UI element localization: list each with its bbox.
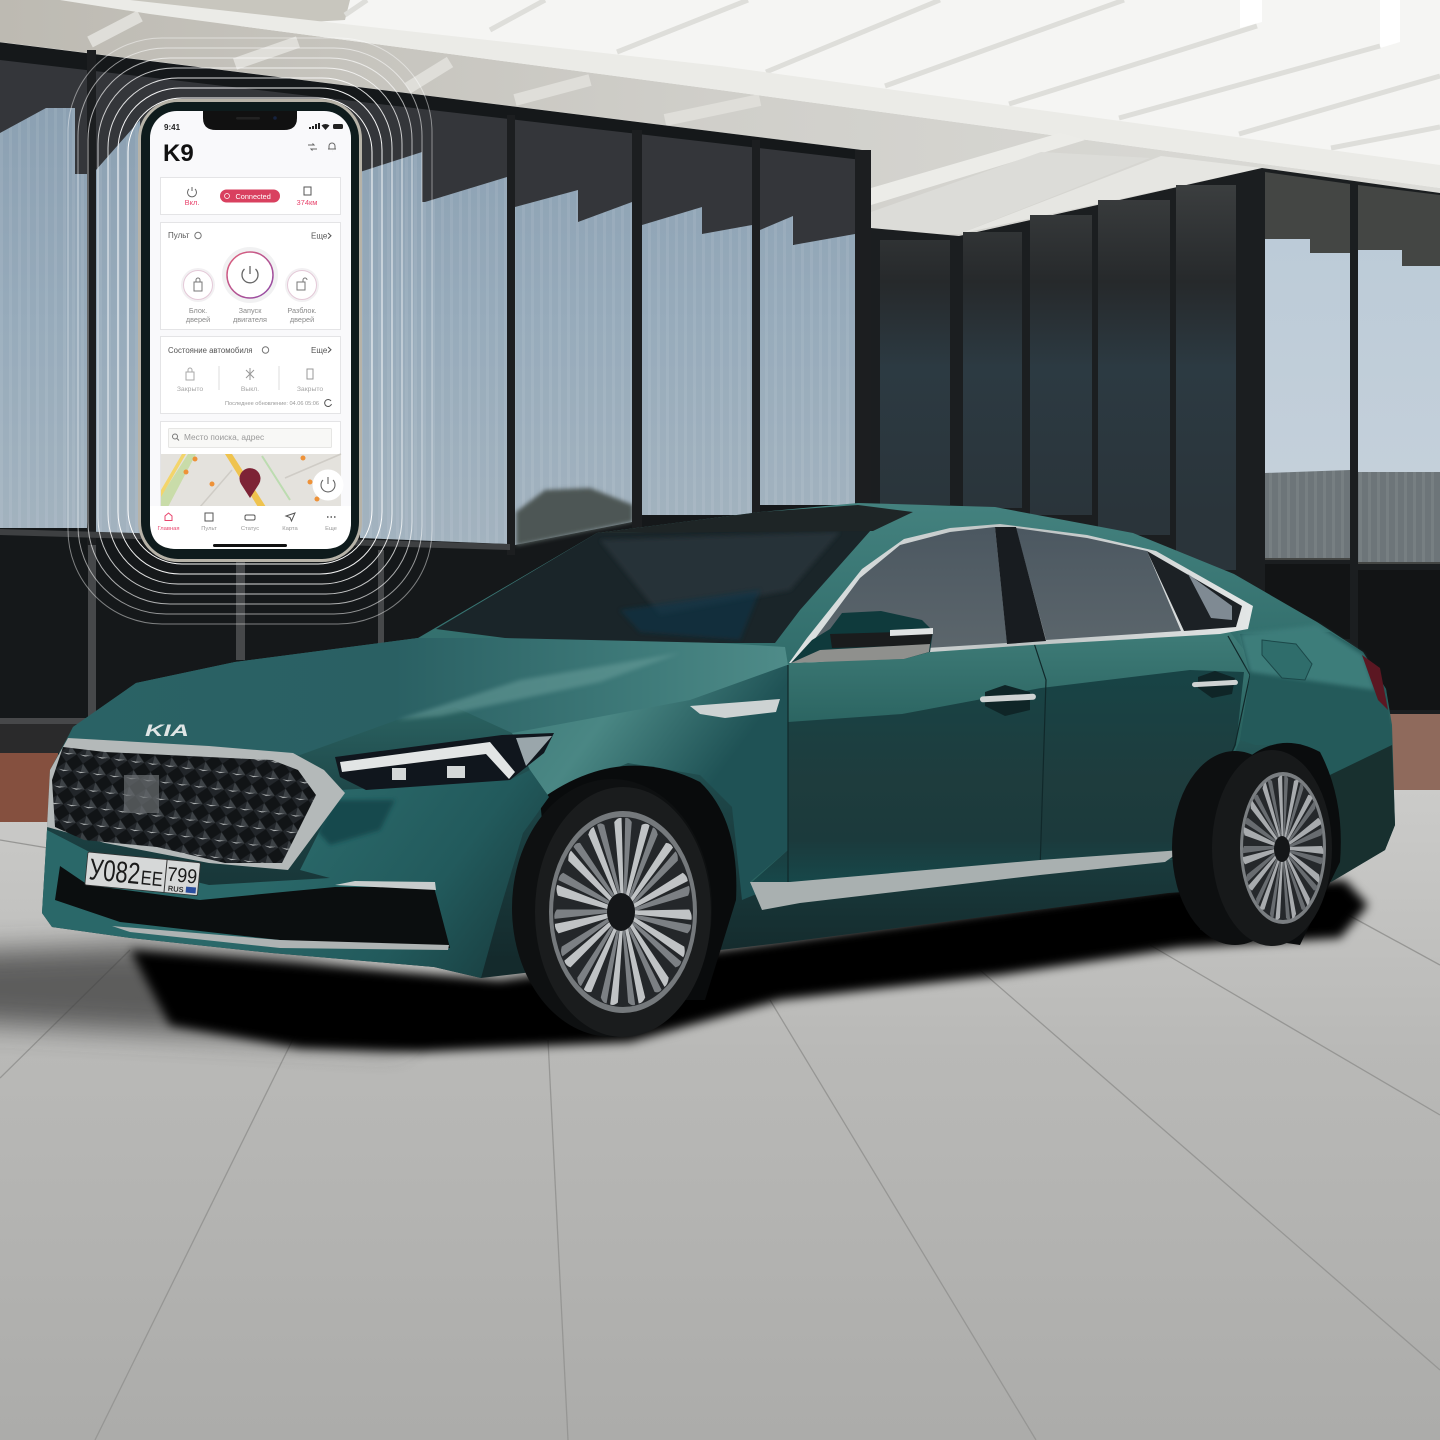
phone frame <box>138 99 362 562</box>
signal rings around phone <box>68 38 432 624</box>
tab bar: Пульт <box>201 526 217 532</box>
header icons <box>308 143 336 151</box>
card: vehicle condition: Состояние автомобиля <box>168 346 252 355</box>
license plate: RUS <box>167 884 184 894</box>
card: vehicle status summary: 374км <box>297 198 317 207</box>
card: remote: Блок. <box>189 306 207 315</box>
card: vehicle status summary: Connected <box>236 192 271 201</box>
phone <box>138 99 362 562</box>
wheel arch <box>540 766 736 1000</box>
front bumper <box>42 770 549 978</box>
notch <box>203 111 297 130</box>
background: brick wall left <box>0 753 58 822</box>
card: vehicle condition <box>160 336 340 414</box>
tab bar: Карта <box>282 526 299 532</box>
tab bar <box>150 506 351 549</box>
card: remote: Пульт <box>168 231 190 240</box>
front wheel <box>512 779 712 1037</box>
card: remote: Запуск <box>239 306 262 315</box>
license plate <box>85 852 200 897</box>
card: remote <box>160 222 340 330</box>
side windows with chrome trim <box>789 524 1253 663</box>
roof <box>597 505 913 533</box>
background: ceiling canopy <box>0 0 1440 240</box>
car <box>42 503 1395 1037</box>
card: map search: Место поиска, адрес <box>184 432 264 442</box>
floating power button <box>312 470 344 500</box>
card: map search <box>160 422 344 512</box>
background: brick wall right <box>1385 714 1440 790</box>
heading K9: K9 <box>163 140 194 167</box>
background: glass facade <box>0 42 1440 760</box>
background: paved ground <box>0 790 1440 1440</box>
car shadow <box>0 880 1368 1052</box>
status bar <box>164 123 343 132</box>
side badge <box>690 699 780 718</box>
card: vehicle condition: Еще <box>311 346 328 355</box>
card: vehicle status summary: Вкл. <box>185 198 199 207</box>
card: remote: дверей <box>186 315 210 324</box>
kia logo: KIA <box>145 721 189 740</box>
card: vehicle condition: Выкл. <box>241 386 259 393</box>
windscreen <box>436 530 871 643</box>
mirror <box>791 611 933 663</box>
status bar: 9:41 <box>164 123 181 132</box>
sill chrome strip <box>750 850 1182 910</box>
rear wheel arch <box>1200 743 1341 945</box>
card: vehicle condition: Последнее обновление: 04.06 05:06 <box>225 401 319 407</box>
button: engine start <box>222 247 278 303</box>
rear wheel <box>1172 750 1332 946</box>
card: remote: двигателя <box>233 315 267 324</box>
card: remote: Разблок. <box>287 306 317 315</box>
tab bar: Еще <box>325 526 337 532</box>
fuel door <box>1262 640 1312 680</box>
tab bar: Статус <box>241 526 259 532</box>
button: unlock <box>285 268 319 302</box>
license plate: У082 <box>88 853 142 891</box>
lower bumper intake <box>55 866 450 950</box>
doors <box>750 632 1252 905</box>
door handles <box>980 671 1238 716</box>
front fender <box>512 664 790 900</box>
tail light <box>1362 655 1388 710</box>
map pin <box>240 468 261 498</box>
rear quarter panel <box>1240 632 1392 775</box>
map <box>161 454 344 507</box>
card: vehicle condition: Закрыто <box>177 386 203 393</box>
card: vehicle status summary <box>160 178 340 214</box>
car body <box>42 503 1395 978</box>
card: remote: Еще <box>311 232 328 240</box>
button: lock <box>181 268 215 302</box>
grille <box>47 738 345 870</box>
hood <box>68 638 788 755</box>
headlight <box>335 733 554 790</box>
tab bar: Главная <box>157 526 180 532</box>
card: vehicle condition: Закрыто <box>297 386 323 393</box>
license plate: 799 <box>166 864 198 889</box>
phone screen <box>150 111 351 549</box>
card: remote: дверей <box>290 315 314 324</box>
license plate: ЕЕ <box>140 867 164 891</box>
